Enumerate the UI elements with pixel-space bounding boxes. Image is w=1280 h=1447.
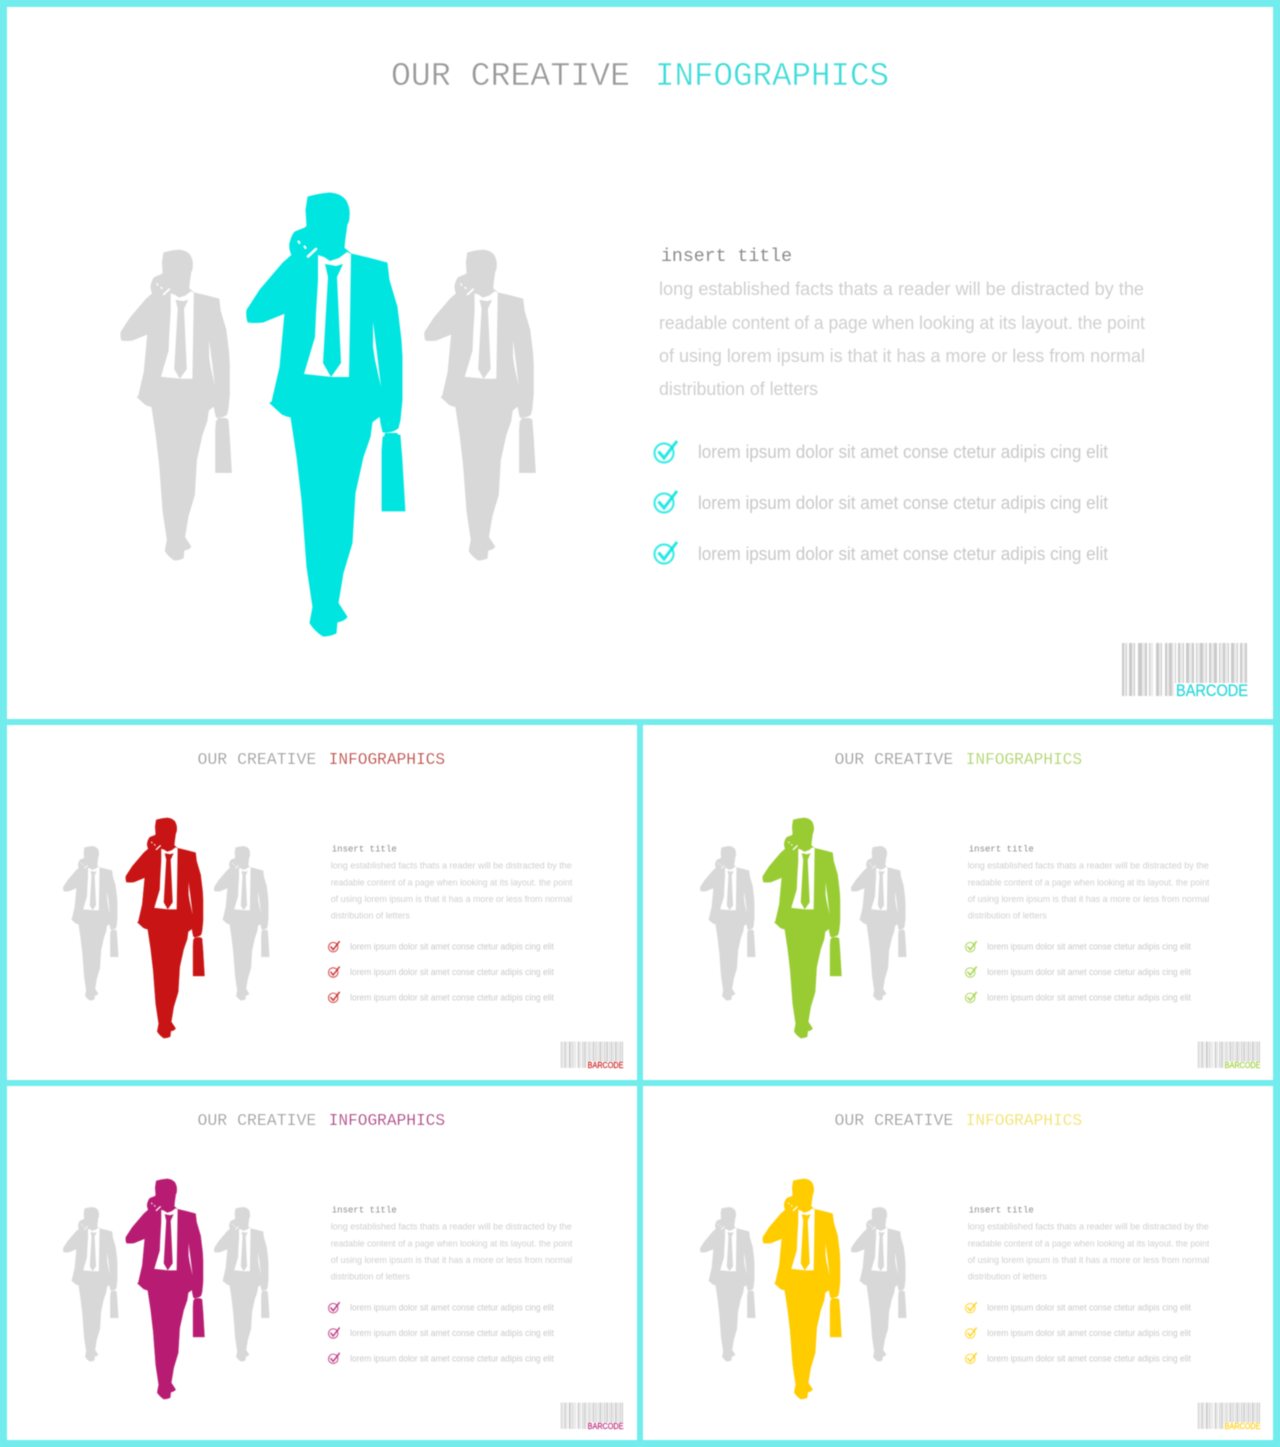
body text: readable content of a page when looking at its layout. the point: [659, 313, 1145, 333]
figure: highlighted man: [126, 818, 204, 1038]
body text: distribution of letters: [331, 1271, 410, 1281]
panel: main cyan: [7, 7, 1273, 719]
checklist: lorem ipsum dolor sit amet conse ctetur adipis cing elit: [698, 544, 1108, 564]
body text: long established facts thats a reader will be distracted by the: [968, 861, 1209, 871]
figure: highlighted man: [247, 193, 405, 636]
title: INFOGRAPHICS: [966, 750, 1082, 769]
body text: [659, 279, 1145, 399]
figure: left grey man: [700, 1207, 755, 1361]
title: [391, 58, 889, 95]
barcode: [561, 1403, 624, 1431]
title: INFOGRAPHICS: [966, 1111, 1082, 1130]
checklist: [965, 1302, 1191, 1364]
body text: distribution of letters: [659, 379, 818, 399]
body text: long established facts thats a reader will be distracted by the: [331, 861, 572, 871]
title: OUR CREATIVE: [391, 58, 630, 95]
title: [198, 750, 445, 769]
checklist: [965, 941, 1191, 1003]
checklist: lorem ipsum dolor sit amet conse ctetur adipis cing elit: [350, 1328, 554, 1338]
checklist: lorem ipsum dolor sit amet conse ctetur adipis cing elit: [350, 942, 554, 952]
body text: [968, 861, 1210, 920]
body text: of using lorem ipsum is that it has a more or less from normal: [659, 346, 1145, 366]
body text: readable content of a page when looking at its layout. the point: [331, 878, 573, 888]
body text: readable content of a page when looking at its layout. the point: [331, 1239, 573, 1249]
body text: [331, 861, 573, 920]
body text: long established facts thats a reader will be distracted by the: [659, 279, 1144, 299]
body text: readable content of a page when looking at its layout. the point: [968, 878, 1210, 888]
panel: red: [7, 725, 637, 1080]
body text: distribution of letters: [968, 1271, 1047, 1281]
figure: left grey man: [700, 846, 755, 1000]
barcode: [1198, 1042, 1261, 1070]
body text: long established facts thats a reader will be distracted by the: [331, 1222, 572, 1232]
barcode: BARCODE: [588, 1061, 624, 1070]
subtitle: insert title: [332, 845, 397, 855]
figure: right grey man: [851, 1207, 906, 1361]
body text: of using lorem ipsum is that it has a more or less from normal: [968, 894, 1209, 904]
subtitle: insert title: [969, 845, 1034, 855]
figure: highlighted man: [763, 1179, 841, 1399]
checklist: lorem ipsum dolor sit amet conse ctetur adipis cing elit: [987, 992, 1191, 1002]
panel: yellow: [643, 1086, 1273, 1440]
barcode: BARCODE: [1225, 1061, 1261, 1070]
panel: green: [643, 725, 1273, 1080]
barcode: BARCODE: [588, 1422, 624, 1431]
checklist: lorem ipsum dolor sit amet conse ctetur adipis cing elit: [987, 967, 1191, 977]
checklist: lorem ipsum dolor sit amet conse ctetur adipis cing elit: [350, 1353, 554, 1363]
barcode: [1122, 643, 1249, 700]
title: [835, 1111, 1082, 1130]
body text: long established facts thats a reader will be distracted by the: [968, 1222, 1209, 1232]
panel: magenta: [7, 1086, 637, 1440]
figure: left grey man: [63, 1207, 118, 1361]
body text: of using lorem ipsum is that it has a more or less from normal: [331, 1255, 572, 1265]
checklist: lorem ipsum dolor sit amet conse ctetur adipis cing elit: [987, 1328, 1191, 1338]
checklist: [328, 1302, 554, 1364]
title: [198, 1111, 445, 1130]
figure: right grey man: [214, 846, 269, 1000]
checklist: [328, 941, 554, 1003]
title: OUR CREATIVE: [835, 750, 953, 769]
subtitle: insert title: [661, 247, 792, 267]
body text: of using lorem ipsum is that it has a more or less from normal: [968, 1255, 1209, 1265]
body text: distribution of letters: [331, 910, 410, 920]
checklist: lorem ipsum dolor sit amet conse ctetur adipis cing elit: [987, 942, 1191, 952]
barcode: BARCODE: [1225, 1422, 1261, 1431]
checklist: lorem ipsum dolor sit amet conse ctetur adipis cing elit: [350, 967, 554, 977]
barcode: BARCODE: [1176, 682, 1248, 700]
figure: highlighted man: [763, 818, 841, 1038]
checklist: lorem ipsum dolor sit amet conse ctetur adipis cing elit: [350, 992, 554, 1002]
checklist: lorem ipsum dolor sit amet conse ctetur adipis cing elit: [350, 1303, 554, 1313]
title: OUR CREATIVE: [198, 1111, 316, 1130]
title: INFOGRAPHICS: [655, 58, 889, 95]
barcode: [1198, 1403, 1261, 1431]
barcode: [561, 1042, 624, 1070]
checklist: lorem ipsum dolor sit amet conse ctetur adipis cing elit: [987, 1353, 1191, 1363]
figure: right grey man: [425, 250, 536, 560]
figure: left grey man: [63, 846, 118, 1000]
body text: [331, 1222, 573, 1281]
figure: left grey man: [121, 250, 232, 560]
body text: of using lorem ipsum is that it has a more or less from normal: [331, 894, 572, 904]
title: INFOGRAPHICS: [329, 750, 445, 769]
subtitle: insert title: [332, 1206, 397, 1216]
title: [835, 750, 1082, 769]
checklist: lorem ipsum dolor sit amet conse ctetur adipis cing elit: [987, 1303, 1191, 1313]
subtitle: insert title: [969, 1206, 1034, 1216]
title: OUR CREATIVE: [835, 1111, 953, 1130]
figure: right grey man: [214, 1207, 269, 1361]
title: OUR CREATIVE: [198, 750, 316, 769]
checklist: [654, 441, 1108, 564]
checklist: lorem ipsum dolor sit amet conse ctetur adipis cing elit: [698, 442, 1108, 462]
body text: distribution of letters: [968, 910, 1047, 920]
figure: right grey man: [851, 846, 906, 1000]
title: INFOGRAPHICS: [329, 1111, 445, 1130]
figure: highlighted man: [126, 1179, 204, 1399]
body text: [968, 1222, 1210, 1281]
body text: readable content of a page when looking at its layout. the point: [968, 1239, 1210, 1249]
checklist: lorem ipsum dolor sit amet conse ctetur adipis cing elit: [698, 493, 1108, 513]
